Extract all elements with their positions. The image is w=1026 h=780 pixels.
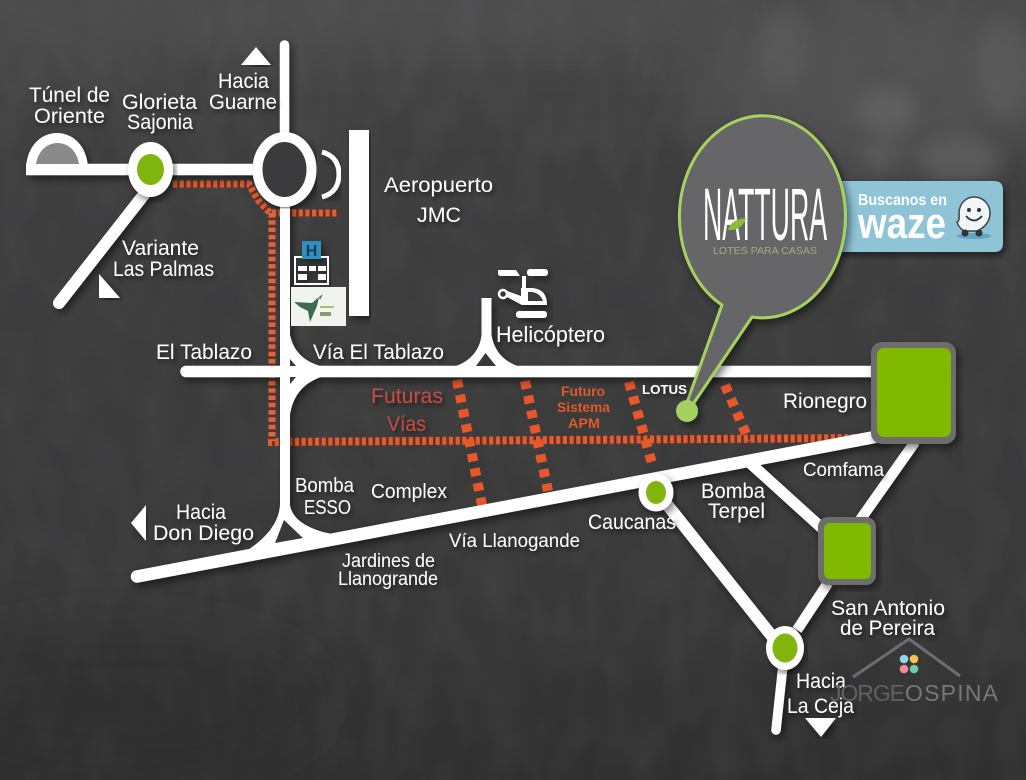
label: Bomba Terpel: Bomba [701,479,765,503]
label: Bomba ESSO: ESSO [304,497,351,519]
label: San Antonio de Pereira [831,596,945,640]
label: Variante Las Palmas: Las Palmas [113,257,214,281]
road: Tablazo upper fillet [289,328,324,367]
arrow: towards La Ceja [805,718,836,737]
label: Hacia Don Diego: Don Diego [153,521,254,545]
label: Hacia Don Diego: Hacia [176,500,226,524]
label: San Antonio de Pereira: San Antonio [831,596,945,620]
panel: Waze badge [835,181,1003,252]
label: Vía El Tablazo: Vía El Tablazo [313,340,444,364]
road: San Antonio to junction [797,583,828,630]
road: Tablazo lower fillet [289,376,324,425]
text: waze: waze [857,199,946,248]
label: Túnel de Oriente: Túnel de [29,83,110,107]
node: San Antonio de Pereira [818,517,876,585]
node: Hacia La Ceja junction [766,626,804,670]
label: Glorieta Sajonia: Sajonia [127,110,193,134]
label: Hacia La Ceja: La Ceja [787,694,854,718]
future road: cross street 4 [725,385,749,441]
label: Comfama: Comfama [803,460,884,481]
label: Bomba ESSO [295,475,355,519]
future road: cross street 1 [457,380,482,505]
label: Hacia Guarne: Guarne [209,90,277,114]
icon: leaf [728,218,746,230]
airport runway [349,130,369,316]
future road: cross street 3 [629,382,653,467]
label: Futuras Vías: Vías [387,413,426,436]
label: Variante Las Palmas: Variante [122,236,199,260]
watermark: Jorge Ospina: JORGE [830,680,905,706]
road: Tablazo [186,366,880,377]
orange dotted future roads [173,184,860,505]
future road: top link from Glorieta [173,184,338,213]
label: Futuro Sistema APM: Sistema [557,399,610,415]
icon: tunnel arch [26,133,88,168]
arrow: towards Don Diego [131,505,146,541]
label: Túnel de Oriente: Oriente [34,104,105,128]
label: San Antonio de Pereira: de Pereira [840,616,935,640]
label: Bomba Terpel [701,479,765,523]
road: Llanogrande main [137,436,880,576]
label: Bomba ESSO: Bomba [295,475,355,497]
label: Aeropuerto JMC: Aeropuerto [384,173,493,197]
road: Variante Las Palmas [59,192,146,303]
label: Túnel de Oriente [29,83,110,128]
label: Bomba Terpel: Terpel [708,499,765,523]
label: Futuro Sistema APM: APM [568,415,600,431]
label: Futuro Sistema APM [557,383,610,431]
label: Variante Las Palmas [113,236,214,281]
label: Futuro Sistema APM: Futuro [561,383,605,399]
road: helicopter fork [453,335,521,367]
label: El Tablazo: El Tablazo [156,340,252,364]
arrow: towards Guarne [241,47,271,65]
label: Rionegro: Rionegro [783,389,867,413]
road: Tunel to roundabout [26,164,258,175]
future road: cross street 2 [525,381,548,491]
road: north-south below roundabout [280,200,290,515]
label: Vía Llanogande: Vía Llanogande [449,531,580,552]
label: Glorieta Sajonia: Glorieta [122,90,197,114]
icon: hospital building [295,241,328,284]
node: Caucanas [638,474,674,512]
road gaps: small dark triangles at forks [275,353,496,543]
label: Aeropuerto JMC: JMC [417,203,461,227]
label: Jardines de Llanogrande [338,551,438,590]
node: Rionegro [871,342,956,444]
label: Hacia La Ceja [787,669,854,718]
future road: horizontal line [268,438,860,442]
logo tagline: LOTES PARA CASAS [713,245,817,257]
label: Complex: Complex [371,481,447,503]
road: north-south to Guarne [280,45,289,136]
arrow: Las Palmas [99,274,120,298]
map labels [29,69,945,718]
icon: waze ghost [957,197,991,239]
text: Buscanos en: Buscanos en [858,192,947,209]
road: to La Ceja [776,665,783,730]
icon: airport curve [322,152,339,197]
label: Glorieta Sajonia [122,90,197,134]
road: helicopter fork stem [482,298,492,340]
label: Futuras Vías [371,385,443,436]
watermark: Jorge Ospina [830,639,999,706]
node: roundabout [258,137,312,202]
future road: vertical link [268,213,276,441]
icon: hospital logo with hummingbird [291,287,346,326]
pin dot [676,400,698,422]
watermark: Jorge Ospina: OSPINA [905,680,999,706]
label: Jardines de Llanogrande: Jardines de [342,551,435,572]
label: Hacia Don Diego [153,500,254,545]
road: Rionegro to San Antonio [860,442,915,520]
white road network [26,45,915,730]
label: Jardines de Llanogrande: Llanogrande [338,569,438,590]
label: Hacia Guarne: Hacia [218,69,269,93]
label: Helicóptero: Helicóptero [496,322,605,347]
label: Aeropuerto JMC [384,173,493,227]
logo: NATTURA [703,173,827,256]
label: LOTUS: LOTUS [642,382,687,397]
callout: Nattura location pin [676,116,845,422]
label: Hacia Guarne [209,69,277,114]
icon: helicopter [498,269,548,318]
label: Caucanas: Caucanas [588,510,676,534]
node: Glorieta Sajonia [128,142,173,197]
tunnel opening [36,143,79,164]
label: Hacia La Ceja: Hacia [796,669,846,693]
road: Comfama branch [750,463,824,530]
road: Caucanas to junction [665,502,775,640]
label: Futuras Vías: Futuras [371,385,443,408]
road: fork at Esso [248,505,332,550]
icon: hospital building: H [306,243,317,260]
